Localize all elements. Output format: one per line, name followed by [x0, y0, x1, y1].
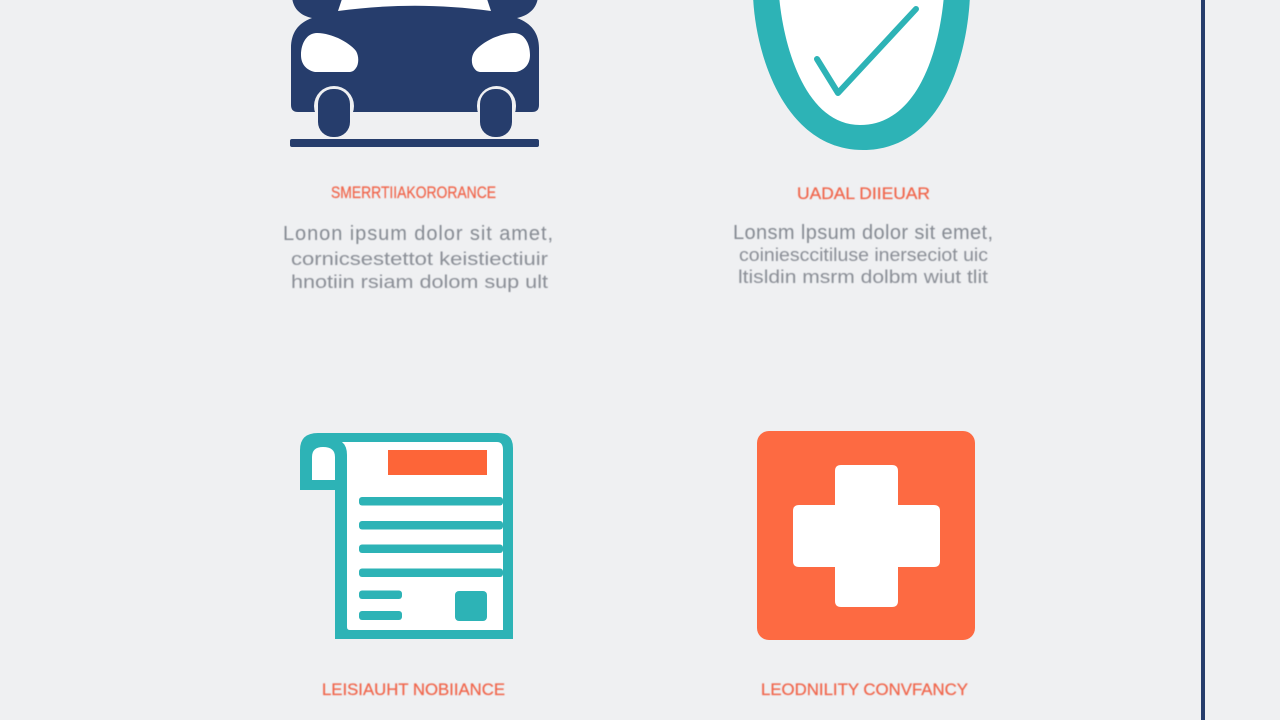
- icon: car: [290, 0, 539, 147]
- panel: document cover: [300, 433, 513, 699]
- icon: shield with check: [753, 0, 970, 150]
- text block: car insurance: Lonon ipsum dolor sit amet,: [283, 223, 553, 245]
- text block: shield cover: [733, 222, 993, 287]
- heading: car insurance: SMERRTIIAKORORANCE: [331, 183, 496, 202]
- text block: car insurance: hnotiin rsiam dolom sup ult: [291, 272, 548, 292]
- text block: car insurance: [283, 223, 553, 292]
- icon: policy document: [300, 433, 513, 639]
- text block: shield cover: ltisldin msrm dolbm wiut tlit: [738, 267, 988, 287]
- heading: medical cover: LEODNILITY CONVFANCY: [761, 680, 968, 699]
- text block: shield cover: coiniesccitiluse inerseciot uic: [739, 245, 988, 265]
- panel: shield cover: [733, 0, 993, 287]
- heading: document cover: LEISIAUHT NOBIIANCE: [322, 680, 505, 699]
- panel: car insurance: [283, 0, 553, 292]
- heading: shield cover: UADAL DIIEUAR: [797, 184, 930, 203]
- text block: car insurance: cornicsestettot keistiectiuir: [291, 249, 548, 269]
- text block: shield cover: Lonsm lpsum dolor sit emet,: [733, 222, 993, 244]
- panel: medical cover: [757, 431, 975, 699]
- vertical rule: [1201, 0, 1205, 720]
- icon: medical cross: [757, 431, 975, 640]
